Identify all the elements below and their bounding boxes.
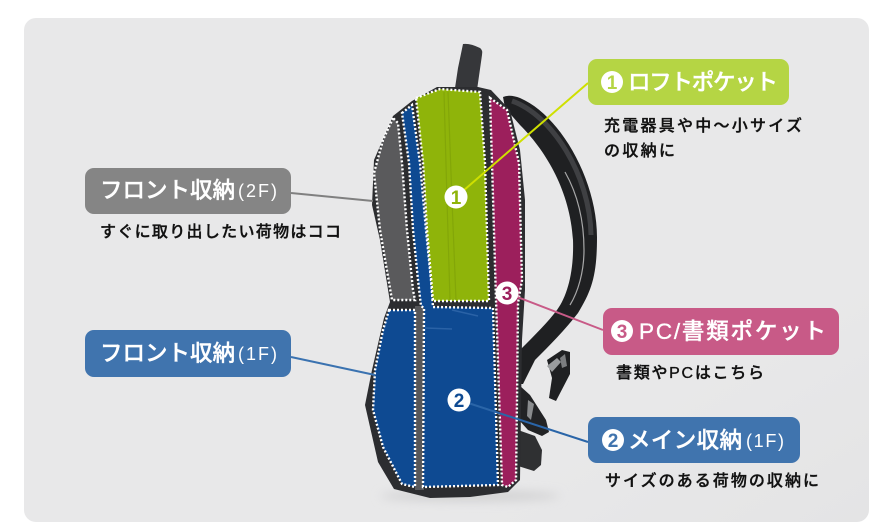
marker 3: 3	[502, 284, 512, 305]
loft pocket zipper detail	[444, 92, 456, 300]
callout: front 2F: フロント収納	[100, 178, 235, 203]
backpack illustration	[365, 44, 597, 501]
marker 3	[496, 282, 518, 305]
panel: front pocket 2F grey	[374, 118, 415, 300]
text: loft pocket description: の収納に	[604, 142, 675, 160]
leader line: PC pocket	[507, 293, 603, 330]
leader line: front 2F	[291, 193, 373, 201]
panel: main compartment blue	[402, 105, 498, 487]
bag body	[365, 87, 525, 498]
marker 2: 2	[454, 391, 464, 412]
lower front side grey strip	[415, 306, 424, 490]
text: main compartment description: サイズのある荷物の収納に	[605, 471, 819, 490]
strap highlights	[512, 101, 591, 305]
callout: front 2F	[85, 168, 291, 214]
callout: PC pocket	[603, 308, 839, 355]
marker 2	[448, 388, 470, 412]
callout: main compartment: 2	[608, 431, 618, 452]
text: PC pocket description: 書類やPCはこちら	[616, 364, 764, 382]
callout: main compartment: (1F)	[746, 431, 784, 451]
callout: front 1F: (1F)	[238, 344, 277, 364]
text: loft pocket description: 充電器具や中～小サイズ	[604, 116, 802, 135]
top handle	[455, 44, 482, 90]
text: loft pocket description	[604, 116, 802, 160]
callout: front 1F: フロント収納	[100, 341, 235, 366]
callout: front 1F	[85, 330, 291, 377]
leader line: main compartment	[459, 400, 588, 442]
shoulder strap	[503, 96, 597, 384]
callout: front 2F: (2F)	[238, 181, 277, 201]
text: front 2F description: すぐに取り出したい荷物はココ	[100, 223, 341, 241]
marker 1	[444, 186, 468, 209]
panel: loft pocket lime	[416, 89, 489, 301]
callout: loft pocket: ロフトポケット	[628, 70, 778, 95]
callout: PC pocket: 3	[617, 322, 627, 343]
marker 1: 1	[451, 188, 462, 209]
callout: main compartment: メイン収納	[628, 428, 742, 453]
panel: front pocket 1F blue	[373, 310, 415, 487]
leader line: front 1F	[291, 357, 375, 375]
floor shadow	[380, 491, 560, 501]
callout: loft pocket: 1	[607, 73, 618, 94]
leader line: loft pocket	[456, 83, 588, 197]
callout: PC pocket: PC/書類ポケット	[639, 319, 826, 344]
panel: PC pocket magenta	[490, 98, 522, 487]
callout: loft pocket	[588, 59, 789, 105]
buckle hardware	[518, 350, 570, 471]
main compartment highlight	[425, 310, 478, 329]
callout: main compartment	[588, 417, 800, 463]
